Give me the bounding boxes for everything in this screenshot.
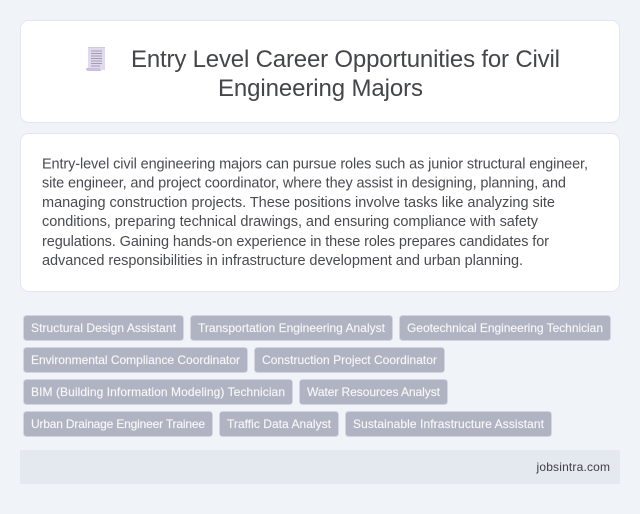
tag: Water Resources Analyst bbox=[300, 380, 448, 404]
tag: Construction Project Coordinator bbox=[254, 348, 444, 372]
tag: Urban Drainage Engineer Trainee: Urban Drainage Engineer Trainee bbox=[31, 417, 205, 431]
tag: Urban Drainage Engineer Trainee bbox=[24, 412, 212, 436]
description text: conditions, preparing technical drawings, and ensuring compliance with safety bbox=[42, 214, 539, 230]
tag: Traffic Data Analyst: Traffic Data Analyst bbox=[227, 417, 332, 431]
description text bbox=[42, 156, 588, 269]
tag list bbox=[24, 316, 610, 436]
footer source text: jobsintra.com bbox=[536, 460, 610, 474]
tag: Geotechnical Engineering Technician: Geotechnical Engineering Technician bbox=[407, 321, 603, 335]
tag: Geotechnical Engineering Technician bbox=[400, 316, 610, 340]
title: Engineering Majors bbox=[218, 75, 423, 102]
tag: Environmental Compliance Coordinator bbox=[24, 348, 248, 372]
tag: Structural Design Assistant: Structural Design Assistant bbox=[31, 321, 177, 335]
tag: Water Resources Analyst: Water Resources Analyst bbox=[307, 385, 441, 399]
tag: BIM Technician bbox=[24, 380, 292, 404]
tag: Transportation Engineering Analyst bbox=[190, 316, 392, 340]
panel: title card bbox=[20, 20, 620, 122]
tag: Sustainable Infrastructure Assistant bbox=[346, 412, 552, 436]
description text: advanced responsibilities in infrastructure development and urban planning. bbox=[42, 253, 523, 269]
panel: description bbox=[20, 134, 620, 292]
icon: paper scroll bbox=[86, 47, 105, 71]
description text: Entry-level civil engineering majors can pursue roles such as junior structural engineer, bbox=[42, 156, 588, 172]
footer bar bbox=[20, 450, 620, 484]
tag: Structural Design Assistant bbox=[24, 316, 184, 340]
tag: Traffic Data Analyst bbox=[220, 412, 338, 436]
tag: Construction Project Coordinator: Construction Project Coordinator bbox=[262, 353, 437, 367]
description text: managing construction projects. These positions involve tasks like analyzing site bbox=[42, 195, 555, 211]
tag: Environmental Compliance Coordinator: Environmental Compliance Coordinator bbox=[31, 353, 240, 367]
tag: Sustainable Infrastructure Assistant: Sustainable Infrastructure Assistant bbox=[353, 417, 545, 431]
tag: BIM Technician: BIM (Building Information Modeling) Technician bbox=[31, 385, 285, 399]
tag: Transportation Engineering Analyst: Transportation Engineering Analyst bbox=[198, 321, 386, 335]
description text: site engineer, and project coordinator, where they assist in designing, planning, and bbox=[42, 176, 566, 192]
title: Entry Level Career Opportunities for Civil bbox=[131, 46, 560, 73]
description text: regulations. Gaining hands-on experience in these roles prepares candidates for bbox=[42, 234, 549, 250]
title bbox=[131, 46, 560, 102]
